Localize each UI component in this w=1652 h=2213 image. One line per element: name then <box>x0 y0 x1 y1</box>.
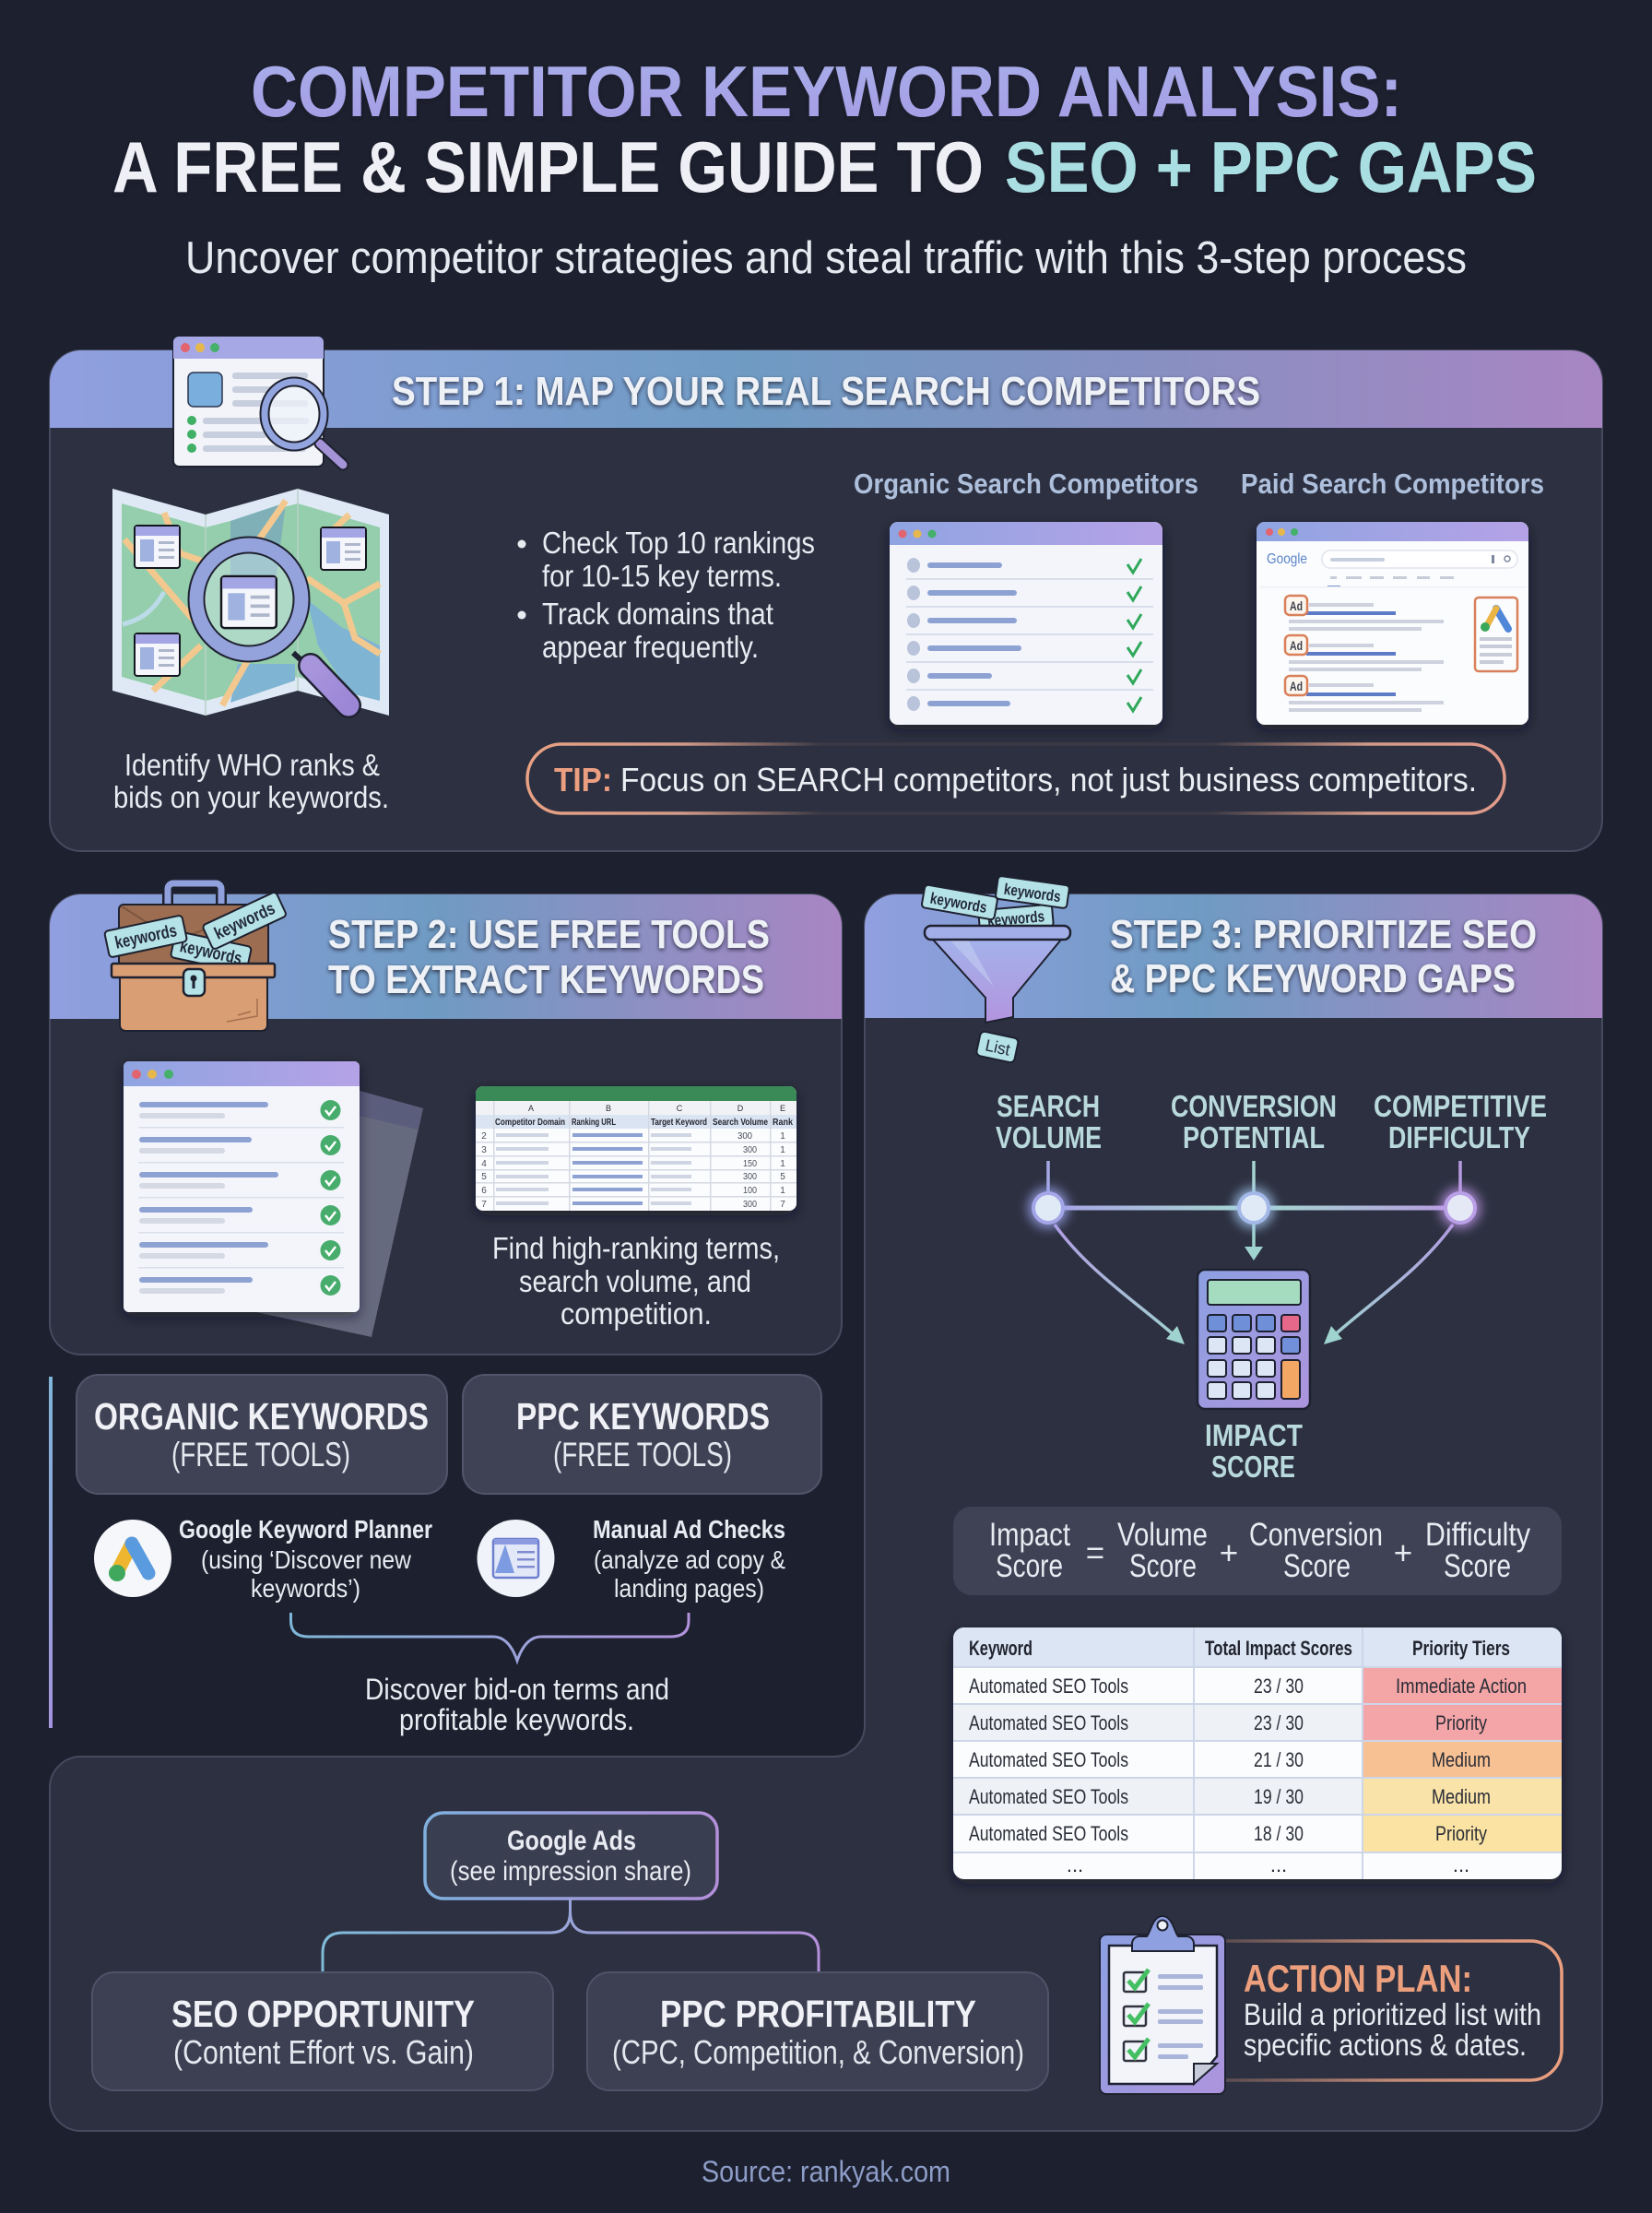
priority table: Automated SEO Tools <box>969 1785 1128 1808</box>
spreadsheet: 5 <box>780 1172 785 1182</box>
priority table: Medium <box>1432 1785 1491 1808</box>
icon: funnel with keywords: keywords <box>986 907 1045 930</box>
title: COMPETITOR KEYWORD ANALYSIS: <box>251 51 1402 132</box>
stacked checklist document <box>124 1061 423 1337</box>
ppc profitability box: PPC PROFITABILITY <box>660 1993 976 2035</box>
factor labels: COMPETITIVE <box>1374 1089 1547 1123</box>
organic keywords box: ORGANIC KEYWORDS <box>94 1395 429 1438</box>
map caption <box>113 748 389 814</box>
organic keywords box <box>77 1375 447 1494</box>
priority table: Automated SEO Tools <box>969 1711 1128 1734</box>
spreadsheet: 1 <box>780 1145 785 1155</box>
step 3 heading: STEP 3: PRIORITIZE SEO <box>1110 912 1537 957</box>
action plan callout: Build a prioritized list with <box>1244 1997 1541 2031</box>
list tag <box>976 1031 1019 1063</box>
spreadsheet: 100 <box>743 1186 757 1196</box>
action plan callout: specific actions & dates. <box>1244 2028 1527 2062</box>
formula box: Impact <box>989 1517 1070 1553</box>
spreadsheet: 300 <box>738 1131 752 1142</box>
paid competitors heading: Paid Search Competitors <box>1241 467 1544 500</box>
priority table: Immediate Action <box>1396 1675 1527 1698</box>
step 3 heading <box>1110 912 1537 1001</box>
seo opportunity box: (Content Effort vs. Gain) <box>173 2033 474 2071</box>
spreadsheet: Rank <box>773 1118 793 1128</box>
priority table: 21 / 30 <box>1254 1748 1304 1771</box>
impact score label <box>1205 1418 1303 1484</box>
ppc profitability box: (CPC, Competition, & Conversion) <box>612 2033 1024 2071</box>
step 3 heading: & PPC KEYWORD GAPS <box>1110 956 1516 1001</box>
ppc keywords box: PPC KEYWORDS <box>516 1395 770 1438</box>
spreadsheet: C <box>677 1104 683 1113</box>
formula box <box>953 1507 1562 1595</box>
priority table: Automated SEO Tools <box>969 1748 1128 1771</box>
step 2 caption: search volume, and <box>519 1264 751 1298</box>
priority table: ... <box>1453 1853 1469 1876</box>
formula box: Volume <box>1117 1517 1208 1553</box>
spreadsheet: A <box>528 1104 534 1113</box>
spreadsheet: 300 <box>743 1200 757 1210</box>
ppc profitability box <box>587 1972 1048 2090</box>
spreadsheet: 300 <box>743 1172 757 1182</box>
title: SEO + PPC GAPS <box>1005 126 1537 207</box>
manual ad checks text: (analyze ad copy & <box>594 1545 785 1574</box>
icon: folded map with magnifier <box>112 489 389 716</box>
priority table: Medium <box>1432 1748 1491 1771</box>
spreadsheet: E <box>780 1104 785 1113</box>
manual ad checks text: landing pages) <box>614 1574 764 1603</box>
spreadsheet: 7 <box>780 1200 785 1210</box>
panel: step 3 and comparison background <box>50 894 1602 2131</box>
formula box: Score <box>1283 1548 1351 1584</box>
icon: funnel with keywords: keywords <box>1003 881 1062 905</box>
icon: briefcase with keywords <box>104 883 287 1031</box>
spreadsheet: 3 <box>481 1145 487 1155</box>
priority table: ... <box>1067 1853 1083 1876</box>
panel: step 2 <box>50 883 842 1355</box>
priority table: 19 / 30 <box>1254 1785 1304 1808</box>
step 2 heading: TO EXTRACT KEYWORDS <box>328 957 764 1002</box>
formula box: Difficulty <box>1425 1517 1530 1553</box>
seo opportunity box: SEO OPPORTUNITY <box>171 1993 475 2035</box>
formula box: Score <box>996 1548 1063 1584</box>
spreadsheet: D <box>738 1104 744 1113</box>
priority table: Automated SEO Tools <box>969 1675 1128 1698</box>
manual ad checks text <box>593 1515 785 1603</box>
subtitle: Uncover competitor strategies and steal traffic with this 3-step process <box>185 233 1467 283</box>
step 2 caption: Find high-ranking terms, <box>492 1231 780 1265</box>
spreadsheet: B <box>606 1104 611 1113</box>
priority table: Priority <box>1435 1711 1487 1734</box>
formula box: + <box>1394 1535 1412 1571</box>
brace connector <box>291 1613 689 1661</box>
factor labels: DIFFICULTY <box>1388 1120 1530 1154</box>
tree connector <box>323 1899 819 1972</box>
formula box: Conversion <box>1249 1517 1383 1553</box>
icon: briefcase with keywords: keywords <box>178 937 243 969</box>
paid results window: Ad <box>1290 679 1303 693</box>
list tag: List <box>984 1035 1012 1059</box>
formula box: + <box>1220 1535 1238 1571</box>
spreadsheet <box>476 1086 796 1211</box>
icon: briefcase with keywords: keywords <box>211 899 278 944</box>
google ads box: Google Ads <box>507 1826 636 1856</box>
spreadsheet: 300 <box>743 1145 757 1155</box>
priority table: Priority <box>1435 1822 1487 1845</box>
priority table: 18 / 30 <box>1254 1822 1304 1845</box>
bullet list: Check Top 10 rankings <box>542 526 815 560</box>
spreadsheet: 1 <box>780 1159 785 1169</box>
panel: step 1 <box>50 337 1602 851</box>
icon: manual ad checks <box>478 1520 555 1597</box>
google keyword planner text <box>179 1515 432 1603</box>
icon: browser with magnifier <box>173 337 343 467</box>
organic competitors heading: Organic Search Competitors <box>854 467 1198 500</box>
paid results window: Ad <box>1290 598 1303 613</box>
google ads box <box>425 1813 717 1899</box>
ppc keywords box: (FREE TOOLS) <box>553 1436 732 1473</box>
factor labels: POTENTIAL <box>1183 1120 1325 1154</box>
discover text: profitable keywords. <box>399 1703 634 1736</box>
bullet list: Track domains that <box>542 597 773 631</box>
google keyword planner text: (using ‘Discover new <box>201 1545 412 1574</box>
priority table: Keyword <box>969 1637 1032 1660</box>
bullet list: appear frequently. <box>542 630 759 664</box>
tip callout <box>527 744 1504 813</box>
paid results window: Google <box>1267 551 1307 567</box>
title <box>112 51 1537 207</box>
score flow diagram <box>1028 1161 1481 1344</box>
spreadsheet: Competitor Domain <box>495 1118 565 1128</box>
priority table: Automated SEO Tools <box>969 1822 1128 1845</box>
factor labels: CONVERSION <box>1171 1089 1337 1123</box>
priority table: Total Impact Scores <box>1205 1637 1352 1660</box>
spreadsheet: Target Keyword <box>651 1118 707 1128</box>
step 1 header band <box>50 350 1602 428</box>
spreadsheet: 5 <box>481 1172 487 1182</box>
factor labels <box>996 1089 1547 1154</box>
priority table: ... <box>1270 1853 1287 1876</box>
tip callout: Focus on SEARCH competitors, not just business competitors. <box>620 761 1477 799</box>
priority table: 23 / 30 <box>1254 1711 1304 1734</box>
impact score label: SCORE <box>1211 1450 1295 1484</box>
priority table: 23 / 30 <box>1254 1675 1304 1698</box>
discover text: Discover bid-on terms and <box>365 1673 669 1706</box>
google ads box: (see impression share) <box>450 1856 691 1887</box>
seo opportunity box <box>92 1972 553 2090</box>
organic results window <box>890 522 1162 725</box>
spreadsheet: 1 <box>780 1186 785 1196</box>
google keyword planner text: Google Keyword Planner <box>179 1515 432 1544</box>
map caption: bids on your keywords. <box>113 780 389 814</box>
source credit: Source: rankyak.com <box>702 2155 950 2188</box>
formula box: Score <box>1129 1548 1197 1584</box>
icon: briefcase with keywords: keywords <box>113 921 179 953</box>
icon: funnel with keywords: keywords <box>929 890 988 917</box>
spreadsheet: 1 <box>780 1131 785 1142</box>
factor labels: SEARCH <box>997 1089 1100 1123</box>
step 1 heading: STEP 1: MAP YOUR REAL SEARCH COMPETITORS <box>392 369 1260 414</box>
spreadsheet: 2 <box>481 1131 487 1142</box>
ppc keywords box <box>463 1375 821 1494</box>
vertical accent line <box>49 1377 53 1728</box>
icon: funnel with keywords <box>921 876 1070 1023</box>
step 3 header band <box>865 894 1602 1018</box>
spreadsheet: 150 <box>743 1159 757 1169</box>
spreadsheet: Search Volume <box>713 1118 768 1128</box>
step 2 caption: competition. <box>560 1296 712 1331</box>
step 2 heading: STEP 2: USE FREE TOOLS <box>328 912 770 957</box>
title: A FREE & SIMPLE GUIDE TO <box>112 126 984 207</box>
factor labels: VOLUME <box>996 1120 1102 1154</box>
manual ad checks text: Manual Ad Checks <box>593 1515 785 1544</box>
paid results window <box>1257 522 1528 725</box>
tip callout: TIP: <box>554 761 612 799</box>
formula box: Score <box>1444 1548 1511 1584</box>
step 2 header band <box>50 894 842 1019</box>
priority table <box>953 1627 1562 1879</box>
step 2 heading <box>328 912 770 1002</box>
google keyword planner text: keywords’) <box>251 1574 360 1603</box>
bullet list: for 10-15 key terms. <box>542 559 782 593</box>
icon: google ads logo <box>94 1520 171 1597</box>
discover text <box>365 1673 669 1736</box>
formula box: = <box>1086 1535 1104 1571</box>
spreadsheet: Ranking URL <box>572 1118 616 1128</box>
priority table: Priority Tiers <box>1412 1637 1510 1660</box>
action plan callout: ACTION PLAN: <box>1244 1957 1472 2000</box>
paid results window: Ad <box>1290 638 1303 653</box>
step 2 caption <box>492 1231 780 1331</box>
impact score label: IMPACT <box>1205 1418 1303 1452</box>
spreadsheet: 7 <box>481 1200 487 1210</box>
icon: clipboard checklist <box>1100 1916 1225 2094</box>
action plan callout <box>1226 1941 1562 2080</box>
spreadsheet: 4 <box>481 1159 487 1169</box>
spreadsheet: 6 <box>481 1186 487 1196</box>
organic keywords box: (FREE TOOLS) <box>171 1436 350 1473</box>
map caption: Identify WHO ranks & <box>124 748 380 782</box>
bullet list <box>518 526 815 664</box>
icon: calculator <box>1198 1270 1310 1409</box>
